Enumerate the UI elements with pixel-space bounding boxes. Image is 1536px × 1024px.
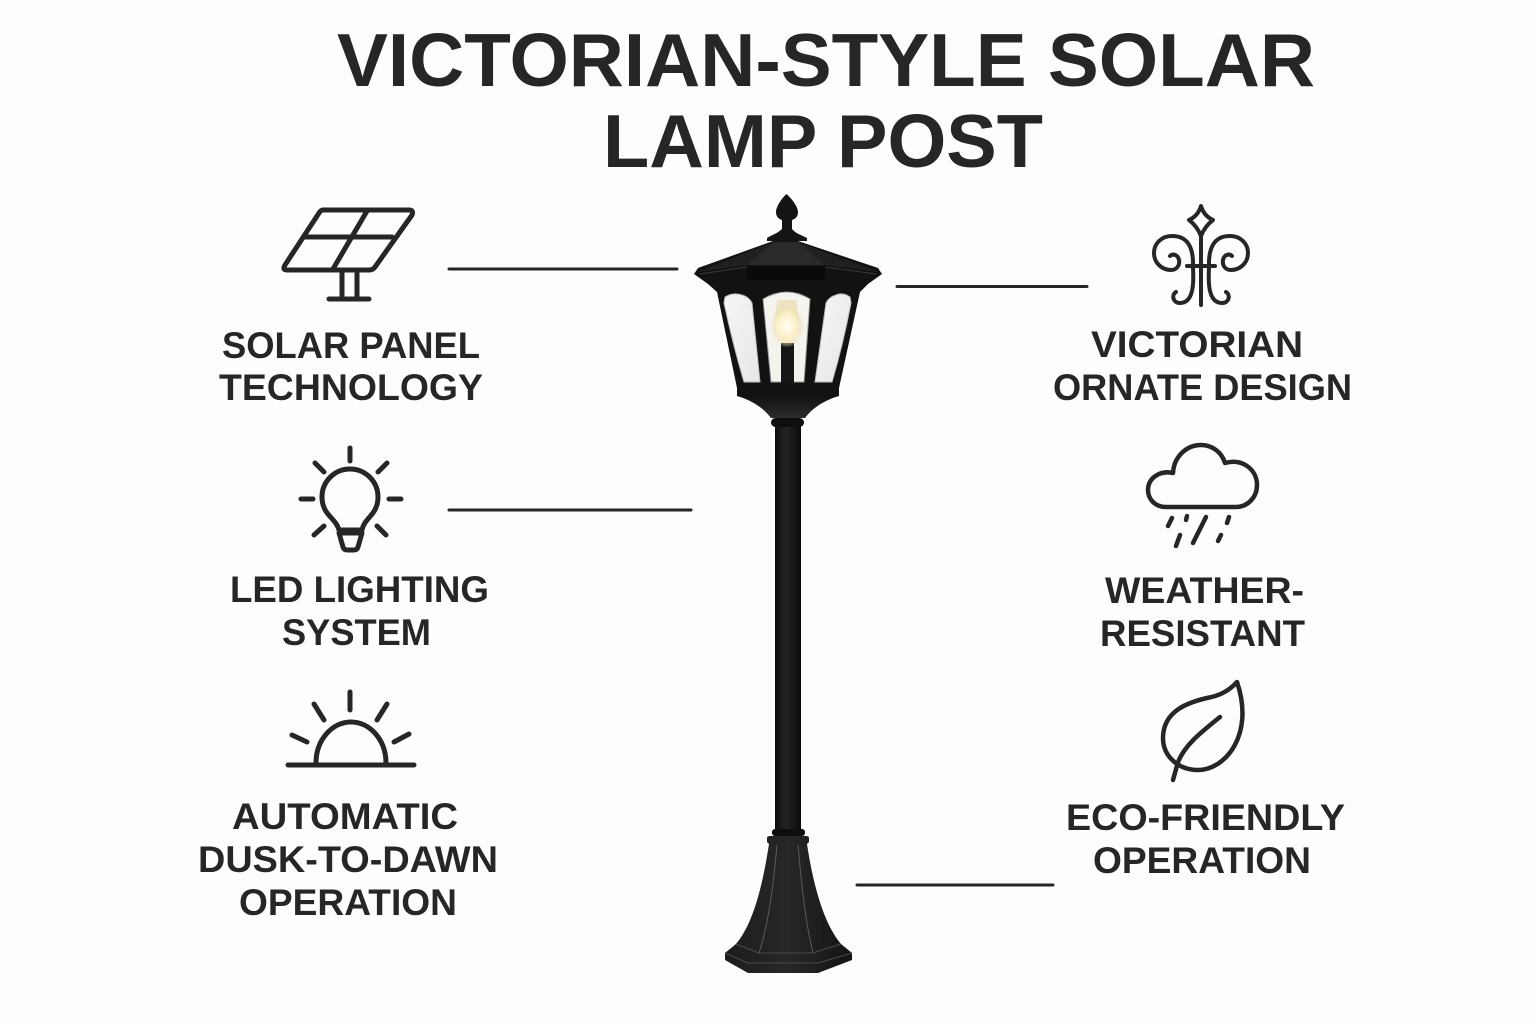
label: Victorian ornate design: ORNATE DESIGN	[1053, 366, 1352, 408]
lamp pole	[775, 424, 801, 834]
label: automatic dusk-to-dawn operation	[198, 795, 498, 923]
title: LAMP POST	[603, 99, 1043, 183]
icon: leaf	[1163, 682, 1242, 780]
label: LED lighting system: SYSTEM	[282, 611, 431, 653]
icon: solar panel	[284, 210, 413, 299]
label: automatic dusk-to-dawn operation: OPERATION	[239, 881, 457, 923]
connector: eco-friendly	[857, 884, 1053, 886]
connector: LED lighting	[449, 508, 691, 512]
icon: ornate fleur	[1154, 206, 1248, 305]
label: automatic dusk-to-dawn operation: DUSK-TO-DAWN	[198, 838, 498, 880]
label: LED lighting system	[230, 568, 489, 653]
label: solar panel technology: SOLAR PANEL	[222, 324, 480, 366]
candle holder	[781, 343, 794, 383]
label: weather-resistant	[1100, 569, 1305, 654]
connector: solar panel	[449, 268, 677, 270]
glowing bulb	[771, 300, 803, 347]
lamp post illustration	[694, 194, 882, 973]
centre glass pane	[763, 292, 810, 382]
label: LED lighting system: LED LIGHTING	[230, 568, 489, 610]
title	[337, 18, 1315, 183]
connector: Victorian design	[897, 285, 1087, 288]
label: Victorian ornate design: VICTORIAN	[1091, 323, 1303, 365]
icon: sunrise	[288, 692, 414, 765]
icon: rain cloud	[1148, 445, 1257, 546]
label: Victorian ornate design	[1053, 323, 1352, 408]
label: eco-friendly operation: ECO-FRIENDLY	[1066, 796, 1345, 838]
label: solar panel technology: TECHNOLOGY	[219, 366, 483, 408]
label: solar panel technology	[219, 324, 483, 408]
label: automatic dusk-to-dawn operation: AUTOMATIC	[232, 795, 458, 837]
lamp base	[725, 829, 852, 973]
label: weather-resistant: WEATHER-	[1105, 569, 1304, 611]
left glass pane	[724, 294, 760, 382]
label: eco-friendly operation	[1066, 796, 1345, 881]
lamp head	[694, 194, 882, 427]
label: weather-resistant: RESISTANT	[1100, 612, 1305, 654]
icon: light bulb	[301, 448, 401, 550]
title: VICTORIAN-STYLE SOLAR	[337, 18, 1315, 102]
label: eco-friendly operation: OPERATION	[1093, 839, 1311, 881]
right glass pane	[815, 294, 851, 382]
